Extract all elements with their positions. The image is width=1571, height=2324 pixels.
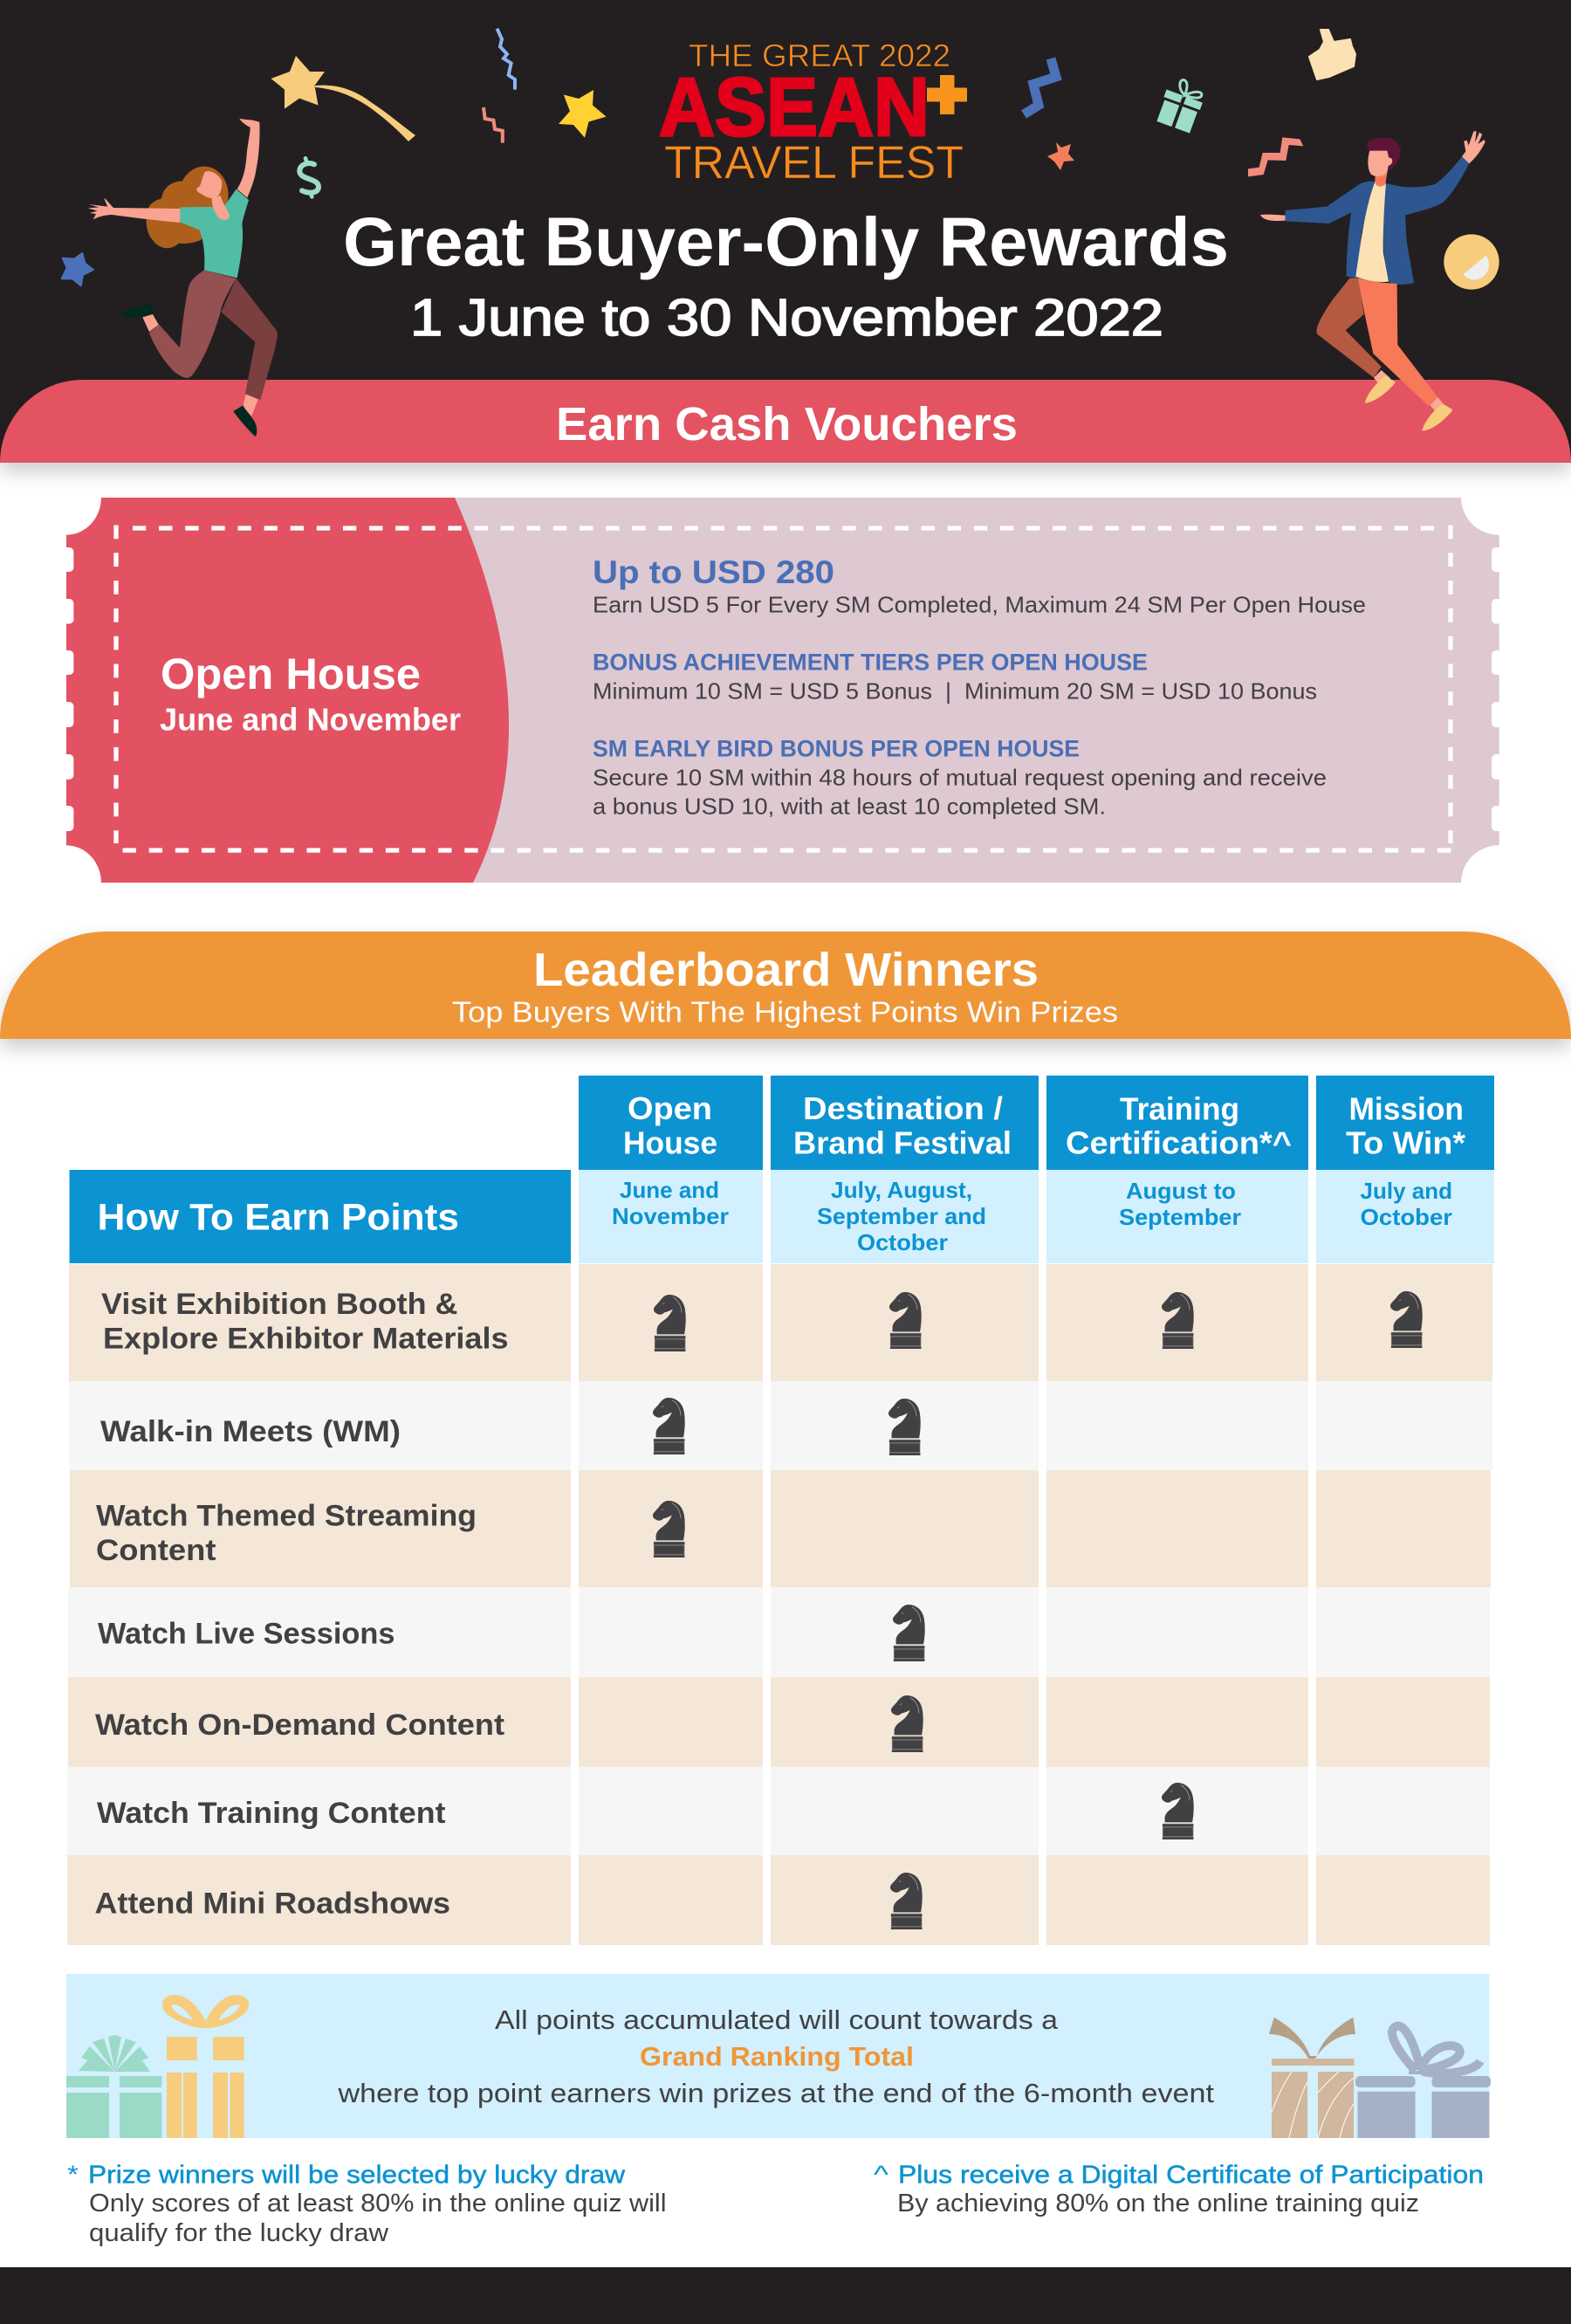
ticket red section <box>66 498 509 883</box>
footnote: certificate <box>874 2162 1484 2217</box>
icon: tan gift <box>1269 2018 1355 2138</box>
footnote line one: Only scores of at least 80% in the online quiz will <box>89 2190 667 2217</box>
column header: destination / brand festival <box>771 1076 1039 1263</box>
banner background <box>66 1974 1489 2138</box>
row label: exhibition booth: Visit Exhibition Booth & <box>101 1288 457 1321</box>
jacket <box>1286 156 1469 285</box>
band subheading: Top Buyers With The Highest Points Win Prizes <box>452 997 1118 1028</box>
neck <box>1375 168 1388 188</box>
column header: open house: Open <box>628 1090 712 1126</box>
text: early bird line one: Secure 10 SM within 48 hours of mutual request opening and receive <box>593 764 1327 790</box>
hand and chin <box>212 196 230 220</box>
header background <box>0 0 1571 463</box>
panel: open house ticket <box>59 498 1506 883</box>
footnote caret: ^ <box>874 2162 888 2190</box>
column header: mission to win <box>1316 1076 1494 1263</box>
band shape <box>0 932 1571 1039</box>
row label: content: Content <box>96 1534 216 1567</box>
row label: training content: Watch Training Content <box>97 1797 446 1830</box>
icon: shooting star <box>271 56 415 141</box>
heading: bonus tiers: BONUS ACHIEVEMENT TIERS PER OPEN HOUSE <box>593 650 1148 676</box>
icon: grey-blue gift <box>1355 2026 1491 2138</box>
ticket edge scallops <box>59 547 1506 831</box>
text: points line: All points accumulated will count towards a <box>495 2004 1059 2035</box>
shoes <box>120 302 257 437</box>
ticket label: Open House <box>161 650 421 698</box>
table row backgrounds <box>67 1264 1492 1945</box>
footer bar <box>0 2267 1571 2324</box>
column header: training certification: Training <box>1120 1091 1239 1126</box>
ticket label <box>160 650 461 737</box>
hands <box>1260 131 1485 221</box>
icon: coin <box>1444 234 1499 290</box>
text: grand ranking total: Grand Ranking Total <box>640 2041 914 2072</box>
back leg <box>1317 278 1382 378</box>
shoes <box>1365 376 1453 430</box>
hair <box>1367 138 1401 170</box>
points table <box>67 1076 1494 1945</box>
band shape <box>0 380 1571 463</box>
logo word: asean: ASEAN <box>659 61 930 154</box>
heading: early bird: SM EARLY BIRD BONUS PER OPEN HOUSE <box>593 735 1080 761</box>
icon: yellow gift <box>162 1995 249 2138</box>
ankles <box>1374 370 1445 412</box>
row label: exhibitor materials: Explore Exhibitor Materials <box>103 1322 508 1355</box>
icon: blue squiggle <box>497 29 515 90</box>
earn cash vouchers band <box>0 380 1571 463</box>
column header: open house: House <box>623 1124 717 1161</box>
column header: training certification: August to <box>1126 1178 1236 1204</box>
column header: open house: June and <box>620 1177 719 1203</box>
leaderboard winners band <box>0 932 1571 1039</box>
banner text <box>337 2004 1214 2108</box>
shirt <box>1355 182 1389 282</box>
column header: training certification <box>1046 1076 1308 1263</box>
ticket details <box>593 554 1366 819</box>
row label: mini roadshows: Attend Mini Roadshows <box>94 1887 450 1921</box>
icon: thumbs up <box>1309 30 1355 79</box>
footnote heading: Plus receive a Digital Certificate of Participation <box>898 2162 1484 2190</box>
event logo <box>659 38 967 189</box>
text: bonus tiers: Minimum 10 SM = USD 5 Bonus | Minimum 20 SM = USD 10 Bonus <box>593 677 1317 704</box>
face <box>1368 151 1392 176</box>
front leg <box>1358 278 1437 406</box>
icon: mint gift <box>66 2035 161 2138</box>
column header: open house: November <box>612 1203 729 1229</box>
face <box>196 171 222 198</box>
icons: chess knights <box>653 1291 1423 1929</box>
shirt <box>180 189 249 278</box>
column header: destination / brand festival: Brand Festival <box>793 1124 1012 1161</box>
date line: 1 June to 30 November 2022 <box>410 289 1163 347</box>
icon: salmon star <box>1047 142 1074 170</box>
hair <box>147 167 229 248</box>
footnote heading: Prize winners will be selected by lucky draw <box>88 2162 626 2190</box>
front leg <box>221 278 278 400</box>
column header: mission to win: October <box>1360 1204 1452 1230</box>
band heading: Earn Cash Vouchers <box>556 398 1018 450</box>
column header: mission to win: To Win* <box>1346 1124 1465 1161</box>
column header: mission to win: July and <box>1360 1178 1452 1204</box>
decorative icons left <box>271 29 607 143</box>
text: earn rate: Earn USD 5 For Every SM Completed, Maximum 24 SM Per Open House <box>593 592 1366 618</box>
icon: blue zigzag <box>1024 58 1056 114</box>
rear leg <box>149 270 237 378</box>
column header: destination / brand festival: Destination / <box>803 1090 1003 1126</box>
column header: open house <box>579 1076 763 1263</box>
row header: how to earn points: How To Earn Points <box>98 1196 459 1238</box>
column header: training certification: Certification*^ <box>1066 1124 1292 1161</box>
decorative icons right <box>1024 30 1499 290</box>
raised arm <box>237 119 260 198</box>
icon: yellow star <box>559 90 607 138</box>
band heading: Leaderboard Winners <box>533 944 1039 996</box>
heading: up to usd 280: Up to USD 280 <box>593 554 834 590</box>
footnote line two: qualify for the lucky draw <box>89 2219 389 2247</box>
icon: salmon squiggle <box>484 107 503 143</box>
illustration: jumping woman <box>88 119 278 437</box>
row labels <box>94 1288 508 1921</box>
column header: destination / brand festival: September and <box>817 1203 986 1229</box>
icon: blue star <box>62 253 93 285</box>
logo line: the great 2022: THE GREAT 2022 <box>689 38 950 73</box>
outstretched arm <box>88 198 181 223</box>
column header: training certification: September <box>1119 1204 1241 1230</box>
row label: walk-in meets: Walk-in Meets (WM) <box>100 1415 401 1448</box>
row label: themed streaming: Watch Themed Streaming <box>96 1500 477 1533</box>
footnote asterisk: * <box>67 2162 79 2190</box>
column header: mission to win: Mission <box>1349 1091 1464 1126</box>
logo plus sign <box>927 75 967 114</box>
ticket label: June and November <box>160 702 461 737</box>
column header: destination / brand festival: July, August, <box>831 1177 972 1203</box>
title: Great Buyer-Only Rewards <box>343 203 1229 280</box>
footnote line: By achieving 80% on the online training quiz <box>897 2190 1419 2217</box>
footnote: lucky draw <box>67 2162 667 2247</box>
panel: grand ranking banner <box>66 1974 1491 2138</box>
row label: live sessions: Watch Live Sessions <box>98 1617 394 1650</box>
text: early bird line two: a bonus USD 10, with at least 10 completed SM. <box>593 793 1106 819</box>
ticket body <box>66 498 1499 883</box>
row header: how to earn points <box>70 1170 571 1263</box>
ankles <box>142 314 258 416</box>
icon: gift <box>1156 75 1208 134</box>
logo line: travel fest: TRAVEL FEST <box>664 137 964 189</box>
icon: dollar sign <box>299 158 319 196</box>
row label: on-demand: Watch On-Demand Content <box>95 1709 504 1742</box>
column header: destination / brand festival: October <box>857 1229 948 1255</box>
illustration: dancing man <box>1260 131 1485 430</box>
icon: salmon zigzag <box>1248 137 1303 176</box>
text: prizes line: where top point earners win prizes at the end of the 6-month event <box>337 2078 1214 2108</box>
